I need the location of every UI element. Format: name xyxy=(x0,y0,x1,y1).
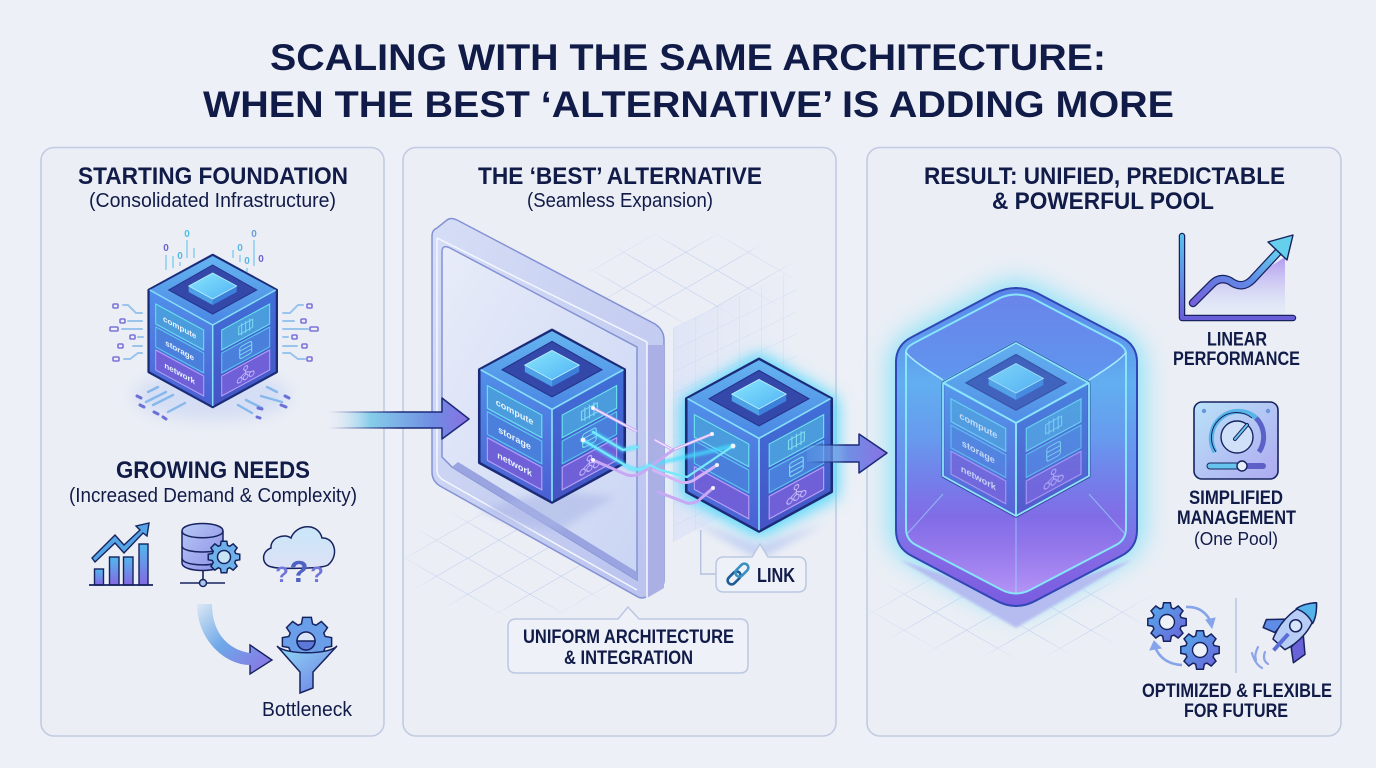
heading: growing needs: (Increased Demand & Complexity) xyxy=(69,485,357,507)
icon: starting cube: compute xyxy=(163,313,197,341)
icon: growth chart xyxy=(89,523,153,585)
heading: result xyxy=(924,163,1285,215)
icon: existing cube xyxy=(479,330,625,502)
icon: circuit traces around cube xyxy=(110,304,318,361)
heading: the best alternative xyxy=(478,163,762,212)
arrow: foundation to alternative xyxy=(328,398,469,439)
icon: existing cube: compute xyxy=(496,397,534,428)
icon: consolidated cube in pool: network xyxy=(961,464,996,494)
ground shadow: new cube xyxy=(690,520,822,560)
title: SCALING WITH THE SAME ARCHITECTURE: xyxy=(270,37,1106,78)
icon: rocket exhaust xyxy=(1252,647,1268,668)
icon: floating data bits above cube: 0 xyxy=(251,229,257,240)
icon: database with gear xyxy=(180,524,240,586)
divider xyxy=(1235,598,1237,673)
icon: starting cube: network xyxy=(164,360,195,386)
heading: starting foundation xyxy=(78,163,348,212)
arrow: expansion to result xyxy=(807,434,887,473)
cube shadow xyxy=(480,490,615,530)
arrow: needs to bottleneck xyxy=(197,604,272,674)
label: optimized and flexible: OPTIMIZED & FLEXIBLE xyxy=(1142,680,1332,702)
icon: added cube xyxy=(686,359,832,531)
back wall grid xyxy=(673,268,797,542)
icon: rocket xyxy=(1254,585,1336,668)
icon: bottleneck funnel xyxy=(277,617,337,693)
heading: starting foundation: STARTING FOUNDATION xyxy=(78,163,348,190)
icon: floating data bits above cube: 0 xyxy=(184,229,190,240)
heading: growing needs xyxy=(69,457,357,507)
label: simplified management xyxy=(1177,487,1296,549)
icon: floating data bits above cube: 0 xyxy=(237,243,243,254)
icon: starting cube xyxy=(149,255,277,407)
icon: starting cube: storage xyxy=(165,338,194,363)
pool cube light edges xyxy=(943,343,1089,516)
heading: starting foundation: (Consolidated Infrastructure) xyxy=(89,190,336,212)
back wall lines xyxy=(673,268,797,542)
icon: floating data bits above cube: 0 xyxy=(244,256,250,267)
panel: starting foundation xyxy=(41,148,384,736)
icon: existing cube: storage xyxy=(498,425,532,453)
label: linear performance: LINEAR xyxy=(1207,328,1267,350)
cube glow xyxy=(681,353,838,538)
frame: scaling boundary xyxy=(432,218,664,598)
heading: result: RESULT: UNIFIED, PREDICTABLE xyxy=(924,163,1285,190)
icon: floating data bits above cube: 0 xyxy=(177,251,183,262)
title xyxy=(203,37,1174,125)
floor grid xyxy=(870,578,1146,657)
heading: result: & POWERFUL POOL xyxy=(992,188,1214,215)
pool ground shadow xyxy=(900,560,1132,628)
label: linear performance: PERFORMANCE xyxy=(1173,348,1300,370)
label: simplified management: MANAGEMENT xyxy=(1177,507,1296,529)
heading: the best alternative: (Seamless Expansion) xyxy=(527,190,713,212)
icon: cloud with question marks: ? xyxy=(275,562,289,587)
callout: uniform architecture: & INTEGRATION xyxy=(564,648,693,669)
panel: best alternative xyxy=(403,148,838,736)
isometric floor grid xyxy=(404,234,790,616)
heading: the best alternative: THE ‘BEST’ ALTERNATIVE xyxy=(478,163,762,190)
callout: link: LINK xyxy=(757,565,795,587)
label: simplified management: (One Pool) xyxy=(1194,528,1278,549)
icon: gears with cycle arrows xyxy=(1148,603,1219,669)
icon: management dial xyxy=(1194,402,1278,479)
label: optimized and flexible: FOR FUTURE xyxy=(1184,700,1288,722)
title: WHEN THE BEST ‘ALTERNATIVE’ IS ADDING MORE xyxy=(203,84,1174,125)
icon: cloud with question marks: ? xyxy=(290,554,308,589)
icon: floating data bits above cube: 0 xyxy=(258,254,264,265)
label: optimized and flexible xyxy=(1142,680,1332,722)
label: linear performance xyxy=(1173,328,1300,370)
callout: uniform architecture: UNIFORM ARCHITECTURE xyxy=(523,627,734,648)
label: bottleneck: Bottleneck xyxy=(262,699,353,721)
icon: data traces below cube xyxy=(137,387,289,419)
panel: result xyxy=(867,148,1341,736)
icon: consolidated cube in pool xyxy=(943,343,1089,516)
icon: consolidated cube in pool: storage xyxy=(962,438,995,467)
icon: consolidated cube in pool: compute xyxy=(959,411,998,442)
icon: floating data bits above cube: 0 xyxy=(163,243,169,254)
links between cubes xyxy=(581,406,735,503)
icon: linear performance chart xyxy=(1182,235,1293,318)
heading: growing needs: GROWING NEEDS xyxy=(116,457,310,484)
icon: chain link xyxy=(726,562,750,586)
callout: uniform architecture xyxy=(508,607,748,673)
label: simplified management: SIMPLIFIED xyxy=(1189,487,1283,509)
icon: existing cube: network xyxy=(497,450,533,480)
arrow head outline xyxy=(250,645,272,674)
icon: floating data bits above cube xyxy=(163,229,264,272)
pool glow xyxy=(890,282,1143,612)
pool container xyxy=(896,288,1137,606)
callout: link xyxy=(701,530,806,592)
cube shadow xyxy=(134,372,290,420)
icon: cloud with question marks xyxy=(264,527,335,589)
icon: cloud with question marks: ? xyxy=(310,562,324,587)
